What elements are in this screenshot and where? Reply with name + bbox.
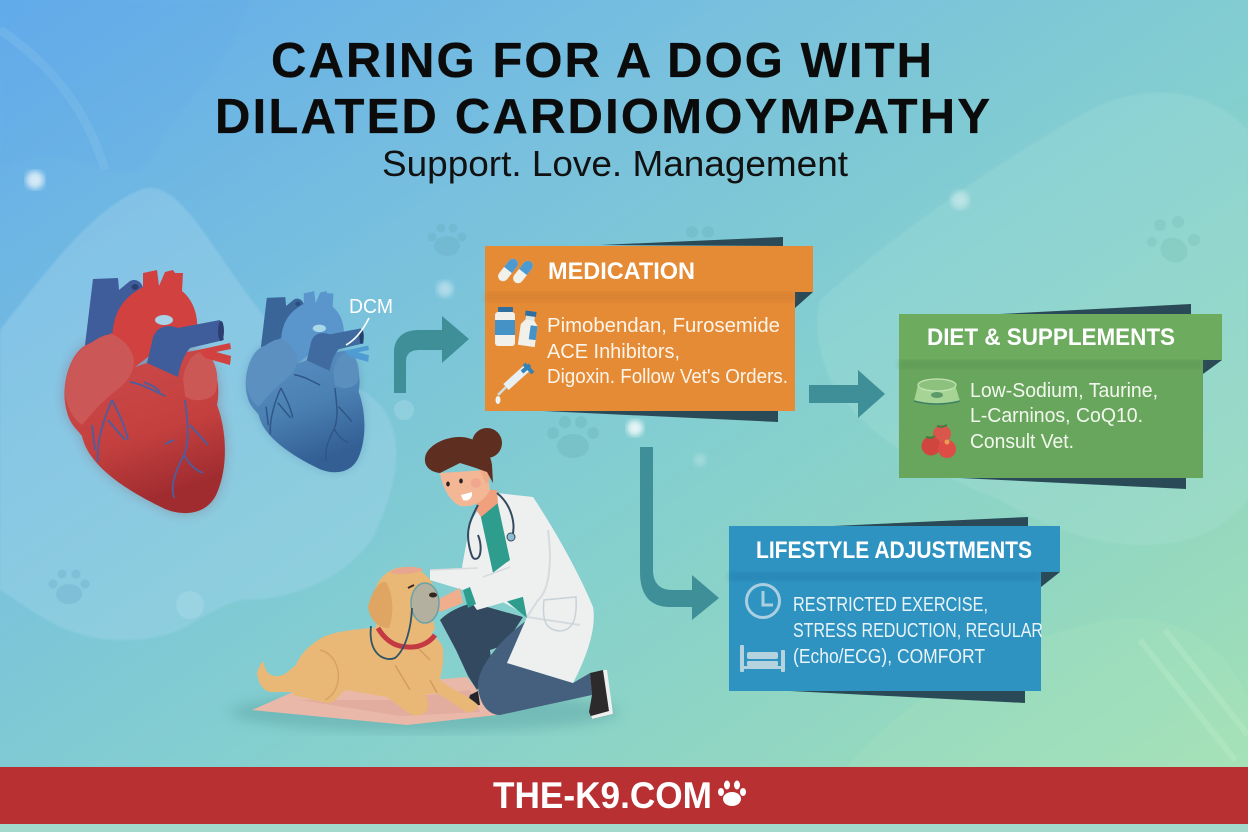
vet — [425, 428, 613, 719]
subtitle: Support. Love. Management — [382, 143, 848, 184]
diet text: L-Carninos, CoQ10. — [970, 405, 1143, 427]
title: DILATED CARDIOMOYMPATHY — [215, 90, 990, 144]
vet head — [440, 470, 490, 506]
icon: paw — [718, 780, 746, 806]
icon: clock — [746, 584, 780, 618]
heading: diet and supplements: DIET & SUPPLEMENTS — [927, 324, 1175, 351]
diet text: Low-Sodium, Taurine, — [970, 380, 1158, 402]
icon: capsules — [496, 257, 535, 285]
arrow: medication to lifestyle — [640, 447, 719, 620]
icon: bed — [740, 645, 785, 672]
paw print: below medication — [547, 416, 599, 458]
lifestyle text: (Echo/ECG), COMFORT — [793, 646, 985, 668]
arrow: medication to diet — [809, 370, 885, 418]
panel: diet and supplements — [899, 304, 1222, 489]
lifestyle text — [793, 594, 1043, 668]
icon: dilated blue heart with DCM label — [246, 291, 393, 472]
medication text: ACE Inhibitors, — [547, 341, 680, 363]
paw print: behind medication top — [686, 226, 714, 238]
illustration: vet and dog — [230, 428, 620, 732]
icon: dilated blue heart with DCM label: DCM — [349, 296, 393, 318]
heading: medication: MEDICATION — [548, 258, 695, 285]
diet text — [970, 380, 1158, 453]
paw print: upper right — [1147, 216, 1200, 267]
panel: lifestyle adjustments — [729, 517, 1060, 703]
panel: medication — [485, 237, 813, 422]
paw print: upper centre — [428, 224, 466, 256]
oxygen mask — [411, 583, 439, 623]
heading: lifestyle adjustments: LIFESTYLE ADJUSTMENTS — [756, 537, 1032, 564]
arrow: hearts to medication — [394, 316, 469, 393]
title: CARING FOR A DOG WITH — [271, 34, 932, 88]
icon: medicine bottles — [495, 307, 540, 347]
icon: healthy red heart — [64, 270, 231, 513]
lifestyle text: RESTRICTED EXERCISE, — [793, 594, 988, 616]
ground shadow — [230, 692, 620, 732]
decorative glow lights — [26, 171, 1096, 619]
medication text — [547, 315, 788, 388]
rug — [252, 677, 497, 725]
diet text: Consult Vet. — [970, 431, 1074, 453]
footer band: THE-K9.COM — [493, 775, 712, 816]
title — [215, 34, 990, 144]
icon: syringe — [496, 364, 533, 404]
icon: tomatoes — [922, 425, 956, 458]
paw print: lower left — [48, 570, 90, 604]
lifestyle text: STRESS REDUCTION, REGULAR — [793, 620, 1043, 642]
footer band — [0, 767, 1248, 832]
dog — [257, 567, 478, 716]
medication text: Digoxin. Follow Vet's Orders. — [547, 366, 788, 388]
icon: food bowl — [914, 379, 960, 404]
medication text: Pimobendan, Furosemide — [547, 315, 780, 337]
